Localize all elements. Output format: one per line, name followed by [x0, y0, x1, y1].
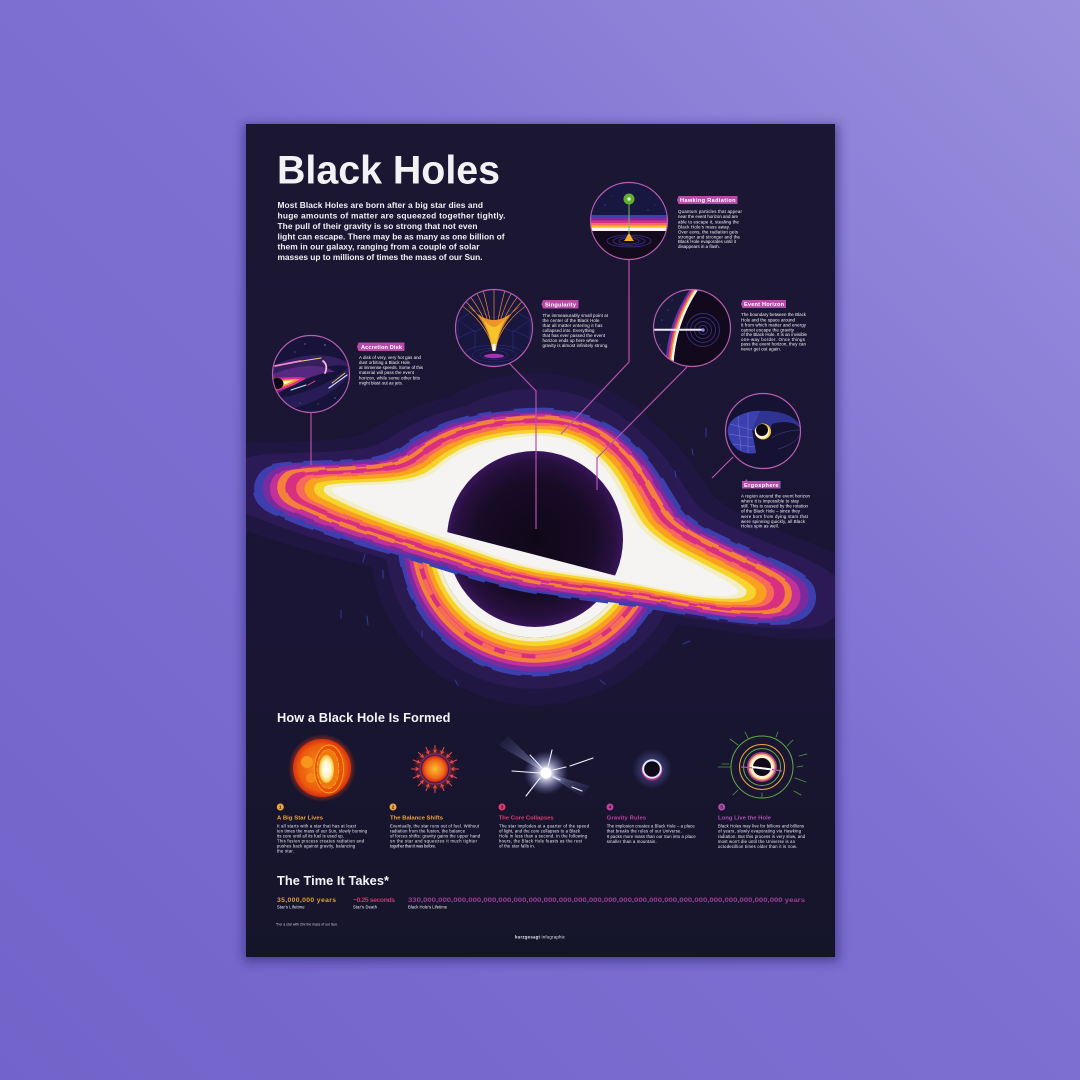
step text 5: of years, slowly evaporating via Hawking — [718, 828, 802, 834]
step text 2: together than it was before. — [390, 844, 436, 849]
poster panel — [246, 124, 835, 957]
timeline: star's death: ~0.25 seconds — [353, 897, 395, 904]
text: singularity: that has ever passed the event — [542, 333, 606, 338]
step number 1: 1 — [279, 805, 282, 810]
step title 4: Gravity Rules — [607, 815, 647, 821]
event shadow, upper part — [447, 451, 623, 576]
step text 5: Black Holes may live for billions and billions — [718, 824, 804, 828]
label: event horizon — [741, 300, 786, 308]
text: event horizon: cannot escape the gravity — [741, 327, 795, 332]
step text 3: The star implodes at a quarter of the speed — [499, 824, 590, 829]
text: event horizon: Hole and the space around — [741, 317, 796, 322]
step title 3: The Core Collapses — [499, 815, 554, 821]
step text 4: The implosion creates a Black Hole – a place — [607, 824, 695, 828]
text: singularity: The immeasurably small point at — [542, 313, 609, 318]
step text 3: Hole in less than a second. In the following — [499, 834, 588, 839]
step text 4: that breaks the rules of our Universe. — [607, 828, 682, 834]
intro paragraph: them in our galaxy, ranging from a couple of solar — [278, 242, 480, 252]
icon: long live the hole — [718, 732, 807, 798]
step text 4: It packs more mass than our Sun into a place — [607, 834, 696, 839]
text: hawking radiation: near the event horizon and are — [678, 214, 739, 219]
heading: how a black hole is formed: How a Black Hole Is Formed — [277, 710, 450, 725]
text: event horizon: it from which matter and energy — [741, 322, 807, 327]
text: hawking radiation: Black Hole evaporates until it — [678, 239, 737, 244]
step text 1: its core until all its fuel is used up. — [277, 834, 344, 839]
text: singularity: gravity is almost infinitely strong. — [542, 343, 608, 348]
icon: hawking radiation lens — [590, 182, 668, 261]
timeline: star's lifetime: Star's Lifetime — [277, 904, 305, 910]
panel: accretion disk — [270, 336, 424, 412]
step text 1 — [277, 824, 368, 854]
step 4 — [606, 804, 696, 844]
text: accretion disk: might blast out as jets. — [359, 380, 403, 385]
text: event horizon — [741, 312, 808, 352]
text: accretion disk — [359, 355, 424, 385]
text: ergosphere — [741, 494, 811, 528]
icon: singularity lens — [456, 289, 532, 366]
text: singularity — [542, 313, 609, 348]
text: ergosphere: Holes spin as well. — [741, 524, 779, 528]
event shadow, lower part — [454, 574, 596, 627]
text: accretion disk: dust orbiting a Black Hole — [359, 360, 411, 365]
step text 5: radiation. But this process is very slow, and — [718, 834, 806, 839]
icon: core collapses — [498, 736, 593, 797]
step text 1: ten times the mass of our Sun, slowly burning — [277, 829, 368, 834]
timeline: black hole's lifetime: 330,000,000,000,000,000,000,000,000,000,000,000,000,000,000,000,000,000,000,000,000,000,000,000,000 years — [408, 897, 805, 904]
text: accretion disk: material will pass the event — [359, 370, 415, 375]
timeline: black hole's lifetime — [408, 897, 805, 910]
step text 4 — [607, 824, 696, 844]
step text 5: octodecillion times older than it is now. — [718, 844, 797, 849]
step text 5: most won't die until the Universe is an — [718, 839, 796, 844]
icon: star balance shifts — [412, 746, 458, 792]
text: ergosphere: were spinning quickly, all Black — [741, 519, 806, 524]
text: hawking radiation: disappears in a flash. — [678, 244, 720, 249]
icon: ergosphere lens — [726, 394, 801, 468]
icon: accretion disk lens — [270, 336, 352, 412]
text: accretion disk: at immense speeds. Some of this — [359, 365, 424, 370]
intro paragraph: The pull of their gravity is so strong that not even — [278, 221, 478, 231]
step 5 — [718, 804, 806, 849]
label: hawking radiation — [677, 196, 738, 204]
text: ergosphere: where it is impossible to stay — [741, 498, 800, 504]
text: hawking radiation: Quantum particles that appear — [678, 209, 743, 214]
text: hawking radiation: Over eons, the radiation gets — [678, 229, 739, 234]
intro paragraph — [278, 200, 506, 262]
step text 1: It all starts with a star that has at least — [277, 824, 357, 829]
step text 2: Eventually, the star runs out of fuel. Without — [390, 824, 480, 829]
label: singularity: Singularity — [545, 302, 577, 308]
icon: gravity rules — [632, 749, 672, 789]
label: accretion disk: Accretion Disk — [361, 345, 403, 351]
step 3 — [498, 804, 590, 849]
poster shadow — [243, 124, 839, 962]
step text 1: This fusion process creates radiation and — [277, 839, 365, 844]
step text 3: of the star falls in. — [499, 844, 535, 849]
panel: singularity — [456, 289, 609, 366]
timeline: black hole's lifetime: Black Hole's Lifetime — [408, 904, 448, 910]
step 2 — [390, 804, 481, 849]
disk layers — [275, 430, 795, 602]
panel: hawking radiation — [590, 182, 743, 261]
footnote: *For a star with 20x the mass of our Sun. — [276, 922, 338, 926]
text: ergosphere: still. This is caused by the rotation — [741, 504, 809, 508]
text: singularity: the center of the Black Hole — [542, 318, 600, 323]
text: event horizon: The boundary between the Black — [741, 312, 807, 317]
step text 2: radiation from the fusion, the balance — [390, 829, 466, 834]
step number 2: 2 — [392, 805, 395, 810]
timeline: star's death — [353, 897, 395, 910]
intro paragraph: light can escape. There may be as many as one billion of — [278, 231, 505, 241]
intro paragraph: masses up to millions of times the mass of our Sun. — [278, 252, 482, 262]
connector lines — [311, 260, 733, 529]
text: hawking radiation: Black Hole's mass away. — [678, 224, 730, 229]
text: event horizon: of the Black Hole. It is an invisible — [741, 332, 808, 337]
step text 3: hours, the Black Hole feasts as the rest — [499, 839, 583, 844]
text: hawking radiation: stronger and stronger and the — [678, 234, 741, 239]
label: singularity — [542, 300, 578, 308]
step number 3: 3 — [501, 805, 504, 810]
timeline: star's lifetime: 35,000,000 years — [277, 897, 336, 904]
heading: the time it takes: The Time It Takes* — [277, 873, 389, 888]
step text 3: of light, and the core collapses to a Black — [499, 829, 581, 834]
label: hawking radiation: Hawking Radiation — [680, 198, 736, 204]
step text 3 — [499, 824, 590, 849]
label: event horizon: Event Horizon — [744, 302, 785, 308]
step text 2: on the star and squeezes it much tighter — [390, 839, 478, 844]
lower ring of the accretion disk — [398, 555, 653, 676]
intro paragraph: huge amounts of matter are squeezed together tightly. — [278, 210, 506, 220]
step text 5 — [718, 824, 806, 849]
text: ergosphere: A region around the event horizon — [741, 494, 811, 498]
step text 4: smaller than a mountain. — [607, 839, 657, 844]
text: event horizon: never get out again. — [741, 347, 781, 352]
step text 2: of forces shifts: gravity gains the upper hand — [390, 834, 481, 839]
panel: event horizon — [654, 284, 808, 372]
step text 2 — [390, 824, 481, 849]
step number 4: 4 — [609, 805, 612, 810]
text: event horizon: pass the event horizon, they can — [741, 342, 807, 347]
text: accretion disk: A disk of very, very hot gas and — [359, 355, 422, 360]
icon: event horizon lens — [652, 288, 732, 368]
timeline: star's death: Star's Death — [353, 904, 378, 910]
step title 5: Long Live the Hole — [718, 815, 772, 821]
step text 1: the star. — [277, 849, 294, 854]
title: Black Holes — [277, 148, 500, 192]
label: ergosphere: Ergosphere — [744, 483, 778, 489]
label: accretion disk — [357, 342, 404, 351]
step title 1: A Big Star Lives — [277, 815, 324, 821]
text: hawking radiation — [678, 209, 743, 249]
timeline: star's lifetime — [277, 897, 336, 910]
credit: kurzgesagt infographic — [515, 934, 566, 940]
text: ergosphere: of the Black Hole – since they — [741, 508, 801, 514]
step 1 — [277, 804, 368, 854]
intro paragraph: Most Black Holes are born after a big star dies and — [278, 200, 483, 210]
panel: ergosphere — [726, 394, 811, 528]
icon: big star — [288, 734, 356, 802]
step number 5: 5 — [720, 805, 723, 810]
text: singularity: collapsed into. Everything — [542, 328, 595, 333]
step title 2: The Balance Shifts — [390, 815, 444, 821]
text: ergosphere: were born from dying stars that — [741, 514, 809, 519]
black hole illustration — [231, 373, 840, 705]
text: singularity: that all matter entering it has — [542, 323, 603, 328]
text: singularity: horizon ends up here where — [542, 338, 599, 343]
text: event horizon: one-way border. Once things — [741, 337, 806, 342]
step text 1: pushes back against gravity, balancing — [277, 844, 356, 849]
text: hawking radiation: able to escape it, stealing the — [678, 219, 740, 224]
text: accretion disk: horizon, while some other bits — [359, 375, 421, 380]
